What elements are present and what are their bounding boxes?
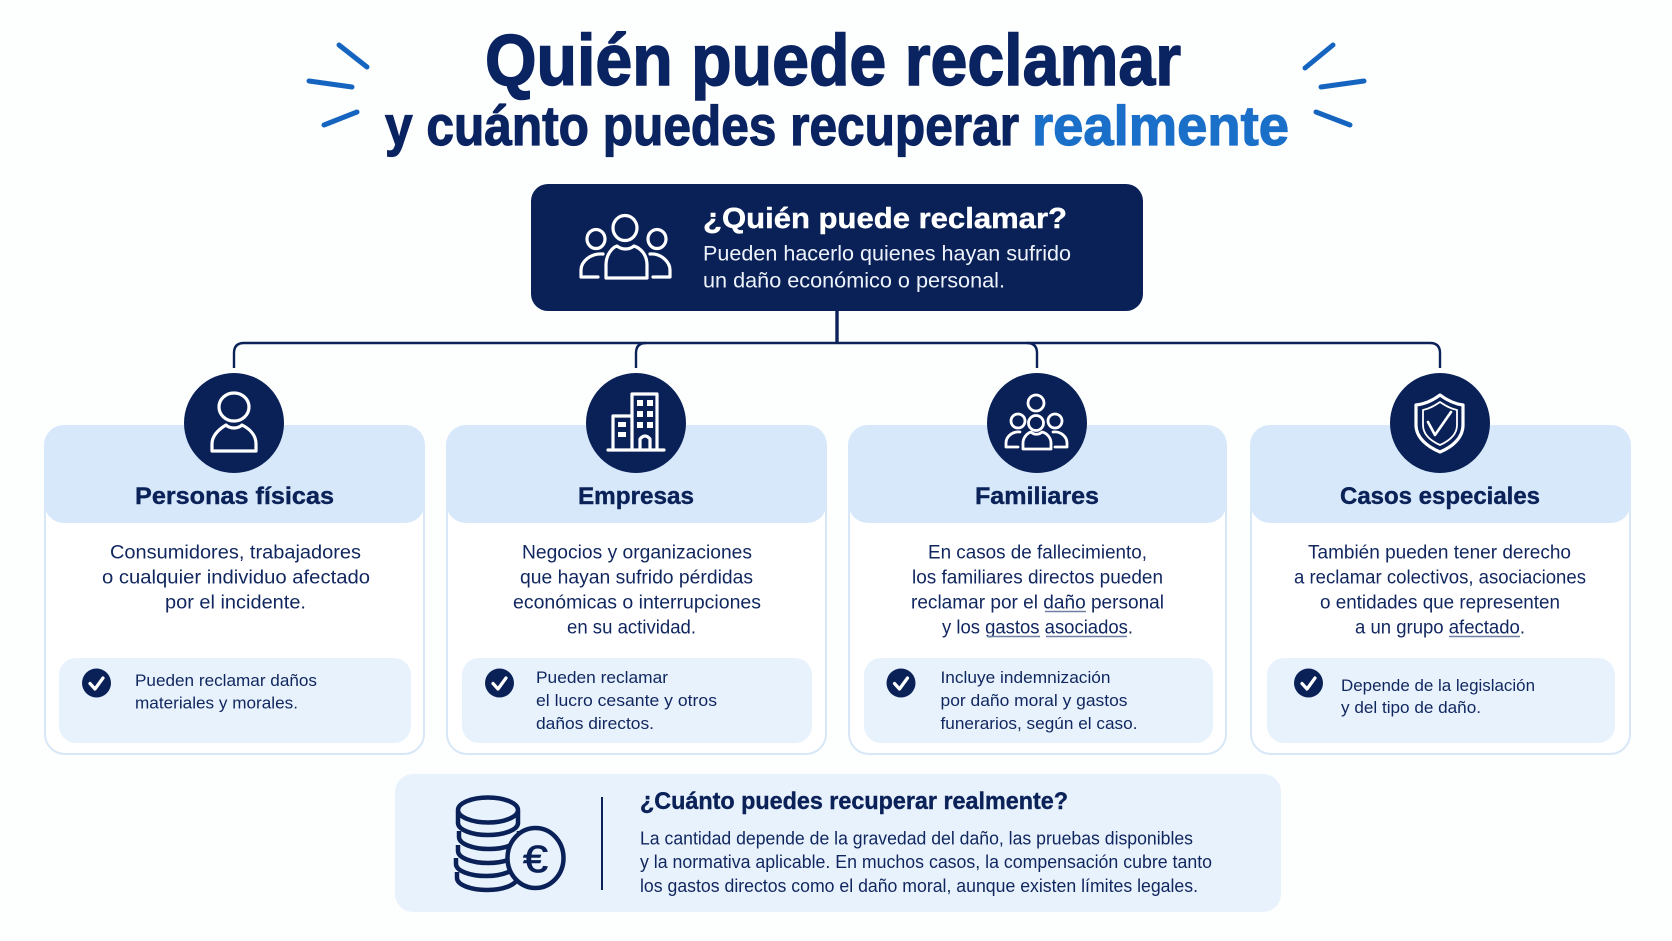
panel: personas físicas: Personas físicas <box>135 483 334 510</box>
panel: cuánto puedes recuperar: ¿Cuánto puedes recuperar realmente? <box>640 788 1068 815</box>
title: realmente <box>1032 94 1289 157</box>
description <box>102 542 370 614</box>
description: los familiares directos pueden <box>912 568 1163 588</box>
panel: familiares <box>848 373 1227 754</box>
icon: check <box>82 668 111 698</box>
description <box>911 542 1164 638</box>
icon: person <box>184 373 284 473</box>
panel: empresas: Empresas <box>578 483 694 510</box>
icon: euro sign: € <box>523 839 548 881</box>
icon: check <box>1294 668 1323 698</box>
note: funerarios, según el caso. <box>940 714 1138 733</box>
title <box>385 21 1289 157</box>
description: por el incidente. <box>165 592 306 614</box>
panel: casos especiales: Casos especiales <box>1340 483 1540 510</box>
icon: family <box>987 373 1087 473</box>
title: y cuánto puedes recuperar <box>385 94 1019 157</box>
note <box>59 658 411 743</box>
description: En casos de fallecimiento, <box>928 542 1147 564</box>
description: reclamar por el daño personal <box>911 592 1164 614</box>
description: a un grupo afectado. <box>1355 618 1525 638</box>
description: o entidades que representen <box>1320 592 1560 614</box>
note <box>462 658 812 743</box>
panel: cuánto puedes recuperar: La cantidad depende de la gravedad del daño, las pruebas disponibles <box>640 828 1193 848</box>
note <box>864 658 1213 743</box>
description: que hayan sufrido pérdidas <box>520 568 753 588</box>
connector lines <box>234 311 1440 368</box>
panel: main question: ¿Quién puede reclamar? <box>703 203 1067 235</box>
icon: check <box>886 668 916 698</box>
title: Quién puede reclamar <box>485 21 1181 101</box>
panel: casos especiales <box>1250 373 1631 754</box>
panel: main question: un daño económico o personal. <box>703 270 1005 292</box>
note: Pueden reclamar <box>536 668 668 687</box>
note: Incluye indemnización <box>940 668 1110 687</box>
description: Consumidores, trabajadores <box>110 542 361 564</box>
panel: familiares: Familiares <box>975 483 1099 510</box>
note: Pueden reclamar daños <box>135 671 317 690</box>
icon: check <box>485 668 514 698</box>
card header <box>44 425 425 523</box>
note: materiales y morales. <box>135 694 298 712</box>
panel: main question: Pueden hacerlo quienes hayan sufrido <box>703 242 1071 266</box>
note: y del tipo de daño. <box>1341 698 1481 717</box>
note: el lucro cesante y otros <box>536 691 717 710</box>
panel: cuánto puedes recuperar <box>395 774 1281 912</box>
icon: shield <box>1390 373 1490 473</box>
panel: main question <box>531 184 1143 311</box>
panel: cuánto puedes recuperar: y la normativa aplicable. En muchos casos, la compensación cubre tanto <box>640 852 1212 872</box>
description: o cualquier individuo afectado <box>102 568 370 588</box>
panel: empresas <box>446 373 827 754</box>
description: También pueden tener derecho <box>1308 542 1571 564</box>
note: Depende de la legislación <box>1341 676 1535 695</box>
note: por daño moral y gastos <box>940 691 1128 710</box>
card header <box>1250 425 1631 523</box>
icon: left sparks <box>309 45 367 125</box>
description: en su actividad. <box>567 618 696 638</box>
card header <box>446 425 827 523</box>
description <box>1294 542 1586 638</box>
note: daños directos. <box>536 714 654 733</box>
card header <box>848 425 1227 523</box>
description: económicas o interrupciones <box>513 592 761 614</box>
description: Negocios y organizaciones <box>522 542 752 564</box>
icon: coins with euro <box>456 798 564 890</box>
panel: personas físicas <box>44 373 425 754</box>
icon: right sparks <box>1305 45 1364 125</box>
icon: group of people <box>581 216 670 278</box>
description: a reclamar colectivos, asociaciones <box>1294 568 1586 588</box>
description <box>513 542 761 638</box>
panel: cuánto puedes recuperar: los gastos directos como el daño moral, aunque existen límites legales. <box>640 876 1198 896</box>
note <box>1267 658 1615 743</box>
description: y los gastos asociados. <box>942 618 1133 638</box>
icon: building <box>586 373 686 473</box>
